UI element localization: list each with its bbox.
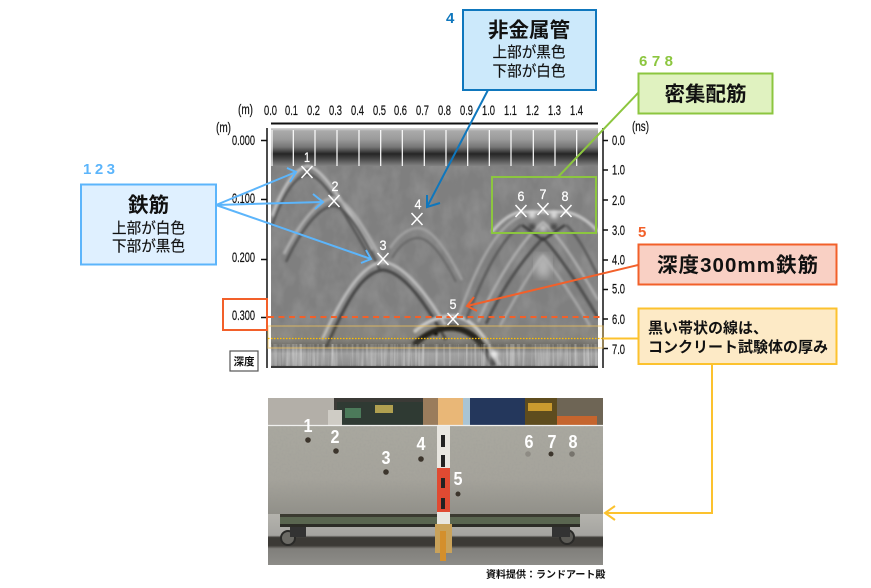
green cluster frame	[492, 177, 596, 233]
orange dashed depth line	[268, 316, 600, 318]
target markers on scan: 2	[332, 178, 339, 194]
top distance axis	[238, 101, 598, 124]
top distance axis: 0.8	[438, 102, 451, 118]
reflection arcs	[272, 166, 598, 366]
yellow dotted line	[268, 338, 603, 340]
arrow: depth 300mm callout to target 5	[467, 265, 638, 311]
depth label box: 深度	[234, 355, 255, 368]
orange highlight on 0.300	[223, 299, 267, 330]
floor	[268, 514, 603, 565]
left depth axis: 0.200	[232, 249, 255, 265]
callout: rebar: 123	[83, 161, 115, 178]
callout: dense rebar: 密集配筋	[664, 83, 746, 106]
callout: rebar: 下部が黒色	[112, 238, 185, 255]
left depth axis: (m)	[216, 119, 231, 135]
right time axis: 0.0	[612, 132, 625, 148]
callout: dense rebar: 678	[639, 53, 673, 70]
concrete block	[268, 425, 603, 515]
left depth axis	[216, 119, 267, 368]
connector: band callout to band	[603, 338, 638, 340]
radar scan image	[271, 128, 598, 368]
callout: depth 300mm rebar: 5	[638, 224, 646, 241]
target markers on scan: 8	[562, 188, 569, 204]
right time axis	[603, 118, 649, 368]
callout: non-metal pipe: 非金属管	[488, 19, 570, 42]
top distance axis: 0.1	[285, 102, 298, 118]
target markers on scan	[302, 149, 572, 325]
arrows: rebar callout to targets	[216, 168, 371, 263]
top distance axis: 0.9	[460, 102, 473, 118]
translucent concrete bottom band	[268, 326, 603, 348]
right time axis: 7.0	[612, 341, 625, 357]
right time axis: 5.0	[612, 280, 625, 296]
top distance axis: 0.6	[394, 102, 407, 118]
measuring staff	[435, 426, 452, 561]
photo number labels: 6	[524, 432, 534, 452]
right time axis: 6.0	[612, 311, 625, 327]
photo number labels: 5	[454, 469, 462, 489]
target markers on scan: 6	[518, 188, 525, 204]
right time axis: 1.0	[612, 162, 625, 178]
left depth axis: 0.000	[232, 132, 255, 148]
target markers on scan: 4	[414, 196, 422, 212]
callout: non-metal pipe	[446, 10, 596, 90]
photo number labels: 4	[416, 434, 426, 454]
callout: non-metal pipe: 4	[446, 10, 455, 27]
top distance axis: 1.1	[504, 102, 517, 118]
target markers on scan: 7	[540, 186, 547, 202]
top distance axis: 1.0	[482, 102, 495, 118]
top distance axis: 0.2	[307, 102, 320, 118]
right time axis: 3.0	[612, 222, 625, 238]
callout: black band note	[638, 308, 836, 364]
callout: rebar: 上部が白色	[112, 220, 185, 237]
target markers on scan: 5	[450, 296, 457, 312]
top distance axis: 1.3	[548, 102, 561, 118]
left depth axis: 0.300	[232, 307, 255, 323]
top distance axis: 1.4	[570, 102, 583, 118]
top distance axis: 0.3	[329, 102, 342, 118]
top distance axis: (m)	[238, 101, 253, 117]
photo number labels: 2	[330, 427, 340, 447]
arrow: band callout to concrete photo	[605, 365, 712, 520]
photo number labels: 3	[382, 448, 390, 468]
white depth ticks on scan	[272, 130, 577, 166]
depth label box	[230, 351, 258, 371]
callout: black band note: 黒い帯状の線は、	[648, 319, 768, 337]
top distance axis: 1.2	[526, 102, 539, 118]
top distance axis: 0.7	[416, 102, 429, 118]
connector: cluster callout to frame	[558, 92, 639, 177]
callout: dense rebar	[638, 53, 772, 114]
callout: rebar: 鉄筋	[128, 194, 169, 217]
workshop background	[268, 398, 603, 426]
photo number labels: 1	[304, 416, 312, 436]
photo number labels: 8	[568, 432, 578, 452]
right time axis: 4.0	[612, 252, 625, 268]
top distance axis: 0.5	[373, 102, 386, 118]
arrow: non-metal pipe to target 4	[427, 90, 488, 207]
callout: rebar	[81, 161, 216, 264]
callout: non-metal pipe: 上部が黒色	[493, 44, 565, 61]
right time axis: (ns)	[632, 118, 649, 134]
callout: depth 300mm rebar	[638, 224, 836, 284]
source credit: 資料提供：ランドアート殿	[486, 568, 605, 581]
green cart	[280, 514, 580, 545]
target markers on scan: 3	[380, 237, 387, 253]
callout: black band note: コンクリート試験体の厚み	[648, 339, 828, 356]
callout: depth 300mm rebar: 深度300mm鉄筋	[657, 254, 818, 277]
left depth axis: 0.100	[232, 190, 255, 206]
right time axis: 2.0	[612, 192, 625, 208]
photo of concrete test block	[268, 398, 603, 565]
photo number labels	[304, 416, 578, 489]
rebar holes	[305, 437, 575, 496]
top distance axis: 0.0	[264, 102, 277, 118]
target markers on scan: 1	[304, 149, 310, 165]
photo number labels: 7	[548, 432, 556, 452]
callout: non-metal pipe: 下部が白色	[493, 63, 565, 80]
top distance axis: 0.4	[351, 102, 364, 118]
